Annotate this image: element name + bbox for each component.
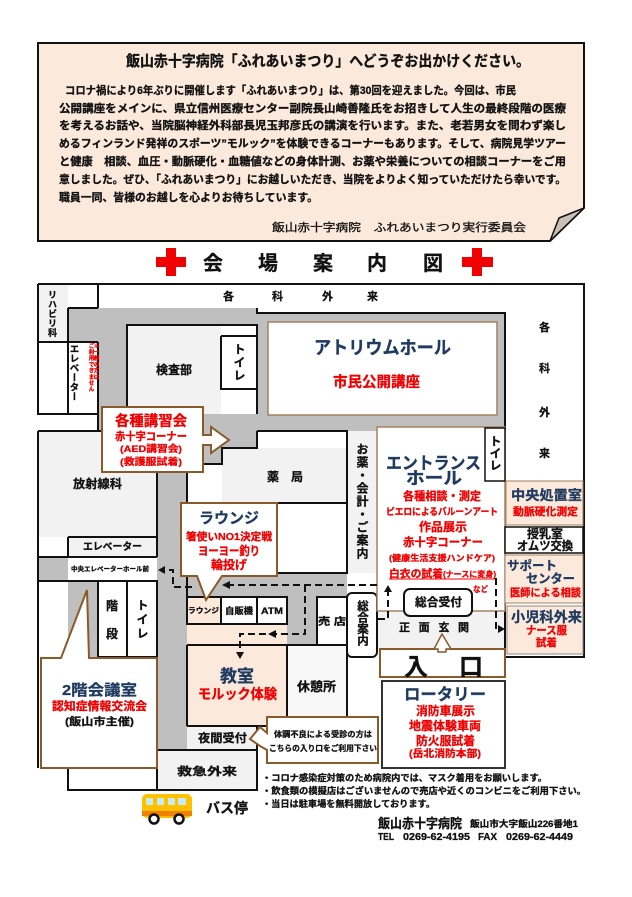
panel: pediatrics: 小児科外来 bbox=[511, 609, 582, 625]
room: elevator: エレベーター bbox=[83, 541, 142, 553]
right label: outpatient clinics: 各 bbox=[539, 320, 550, 334]
footer: hospital contact: FAX bbox=[478, 832, 497, 843]
panel: entrance hall: など bbox=[473, 584, 488, 594]
panel: rotary: 防火服試着 bbox=[416, 733, 475, 748]
room: classroom molkky: モルック体験 bbox=[198, 686, 277, 702]
callout: second-floor meeting room: 2階会議室 bbox=[62, 681, 137, 699]
notes: ・コロナ感染症対策のため病院内では、マスク着用をお願いします。 bbox=[262, 772, 547, 783]
callout: lounge: ラウンジ bbox=[199, 510, 259, 527]
heading: venue guide: 内 bbox=[367, 252, 387, 275]
room: toilet entrance: トイレ bbox=[488, 435, 502, 471]
callout: workshops: 赤十字コーナー bbox=[115, 429, 187, 443]
walls bbox=[38, 284, 584, 790]
callout: lounge bbox=[181, 503, 277, 600]
panel: support center: サポート bbox=[507, 558, 557, 573]
top label: outpatient clinics: 科 bbox=[272, 289, 283, 303]
top label: outpatient clinics: 来 bbox=[367, 289, 378, 303]
room: classroom molkky: 教室 bbox=[220, 667, 254, 686]
panel: central treatment room bbox=[506, 481, 583, 525]
front entrance label: 正面玄関 bbox=[399, 620, 469, 634]
right label: outpatient clinics: 科 bbox=[539, 361, 550, 375]
room: radiology: 放射線科 bbox=[73, 476, 122, 491]
footer: hospital contact: TEL bbox=[378, 832, 394, 843]
elevator notice bbox=[88, 342, 99, 393]
panel: entrance hall bbox=[377, 427, 505, 611]
room: medicine, billing, information: お薬・会計・ご案内 bbox=[355, 443, 369, 560]
room: shop bbox=[317, 597, 347, 645]
main reception: 総合受付 bbox=[415, 595, 463, 609]
heading: venue guide bbox=[156, 248, 493, 276]
arrows: guide route bbox=[158, 566, 505, 659]
notes bbox=[262, 772, 586, 809]
row: lounge, vending, ATM: ATM bbox=[261, 606, 283, 616]
panel: entrance hall: エントランス bbox=[386, 454, 481, 473]
greeting body text: 職員一同、皆様のお越しを心よりお待ちしています。 bbox=[59, 190, 318, 204]
room: classroom molkky bbox=[198, 667, 277, 702]
panel: entrance hall: ピエロによるバルーンアート bbox=[386, 507, 498, 518]
icon: red cross right bbox=[462, 248, 493, 276]
room: general information: 総合案内 bbox=[356, 599, 369, 647]
right label: outpatient clinics bbox=[539, 320, 550, 460]
panel: entrance hall: 作品展示 bbox=[419, 519, 467, 534]
callout: workshops: (救護服試着) bbox=[120, 456, 182, 468]
panel: rotary: 消防車展示 bbox=[416, 703, 475, 718]
notes: ・当日は駐車場を無料開放しております。 bbox=[262, 798, 435, 809]
room: pharmacy: 薬 局 bbox=[267, 469, 303, 484]
room: rest area: 休憩所 bbox=[297, 679, 337, 694]
room: rehabilitation: リハビリ科 bbox=[47, 290, 57, 338]
icon: folded corner bbox=[550, 208, 584, 241]
callout: lounge: 箸使いNO1決定戦 bbox=[186, 530, 273, 543]
panel: entrance hall: 赤十字コーナー bbox=[403, 535, 483, 549]
greeting body text: 公開講座をメインに、県立信州医療センター副院長山崎善隆氏をお招きして人生の最終段階の医療 bbox=[59, 101, 566, 115]
room: toilet west bbox=[127, 581, 157, 657]
entrance sign with arrow: 口 bbox=[459, 654, 483, 681]
panel: support center bbox=[505, 555, 583, 603]
panel: central treatment room: 中央処置室 bbox=[511, 487, 582, 503]
greeting body text bbox=[59, 83, 566, 204]
panel: atrium hall bbox=[268, 322, 497, 415]
icon: red cross left bbox=[156, 248, 186, 276]
callout: workshops: 各種講習会 bbox=[115, 412, 187, 430]
callout: second-floor meeting room: (飯山市主催) bbox=[65, 715, 134, 728]
callout: lounge: ヨーヨー釣り bbox=[198, 543, 260, 558]
panel: support center: センター bbox=[526, 572, 575, 586]
panel: entrance hall: 白衣の試着 bbox=[389, 567, 443, 580]
footer: hospital contact: 飯山市大字飯山226番地1 bbox=[470, 818, 578, 829]
room fills bbox=[38, 284, 505, 790]
callout: workshops bbox=[102, 407, 229, 472]
panel: nursing room bbox=[505, 526, 583, 553]
entrance sign with arrow bbox=[380, 634, 505, 681]
right label: outpatient clinics: 外 bbox=[539, 405, 550, 419]
footer: hospital contact: 0269-62-4195 bbox=[403, 832, 470, 843]
greeting body text: コロナ禍により6年ぶりに開催します「ふれあいまつり」は、第30回を迎えました。今回は、市民 bbox=[65, 83, 516, 97]
row: lounge, vending, ATM bbox=[187, 597, 287, 624]
floor plan bbox=[38, 284, 584, 790]
room: laboratory: 検査部 bbox=[156, 362, 192, 377]
heading: venue guide: 会 bbox=[203, 252, 223, 275]
room: stairs bbox=[98, 581, 127, 657]
footer: hospital contact bbox=[378, 816, 578, 843]
panel: rotary: 地震体験車両 bbox=[409, 718, 481, 733]
panel: rotary: (岳北消防本部) bbox=[409, 747, 481, 760]
panel: entrance hall: (健康生活支援ハンドケア) bbox=[389, 553, 495, 563]
greeting body text: めるフィンランド発祥のスポーツ”モルック”を体験できるコーナーもあります。そして、病院見学ツアー bbox=[59, 136, 566, 150]
footer: hospital contact: 飯山赤十字病院 bbox=[378, 816, 462, 831]
panel: atrium hall: 市民公開講座 bbox=[333, 373, 420, 391]
callout: unwell visitors bbox=[250, 717, 378, 763]
room: shop: 売 店 bbox=[318, 615, 346, 628]
elevator west: エレベーター bbox=[68, 344, 79, 401]
room: toilet entrance bbox=[485, 428, 505, 481]
main reception bbox=[404, 589, 472, 616]
top label: outpatient clinics: 各 bbox=[223, 289, 234, 303]
room: toilet north: トイレ bbox=[232, 343, 246, 382]
room: general information bbox=[347, 593, 377, 657]
label: bus stop: バス停 bbox=[206, 800, 248, 816]
panel: nursing room: 授乳室 bbox=[527, 526, 563, 541]
heading: venue guide: 場 bbox=[258, 252, 278, 275]
elevator notice: ※一般の方は bbox=[92, 343, 99, 381]
heading: venue guide: 案 bbox=[313, 252, 333, 275]
panel: rotary: ロータリー bbox=[404, 685, 486, 704]
room: emergency: 救急外来 bbox=[177, 764, 237, 778]
corridors bbox=[38, 308, 505, 750]
footer: hospital contact: 0269-62-4449 bbox=[506, 832, 573, 843]
panel: central treatment room: 動脈硬化測定 bbox=[513, 505, 579, 518]
callout: second-floor meeting room bbox=[41, 590, 157, 768]
right label: outpatient clinics: 来 bbox=[539, 446, 550, 460]
panel: pediatrics: ナース服 bbox=[526, 624, 567, 637]
panel: atrium hall: アトリウムホール bbox=[314, 338, 451, 358]
room: toilet west: トイレ bbox=[135, 599, 149, 641]
greeting signature: 飯山赤十字病院 ふれあいまつり実行委員会 bbox=[272, 220, 526, 234]
greeting title: 飯山赤十字病院「ふれあいまつり」へどうぞお出かけください。 bbox=[126, 52, 530, 70]
callout: second-floor meeting room: 認知症情報交流会 bbox=[52, 699, 148, 713]
panel: nursing room: オムツ交換 bbox=[517, 538, 573, 553]
panel: pediatrics: 試着 bbox=[536, 636, 557, 649]
entrance sign with arrow: 入 bbox=[404, 654, 428, 681]
row: lounge, vending, ATM: 自販機 bbox=[225, 605, 253, 616]
top label: outpatient clinics bbox=[223, 289, 378, 303]
panel: entrance hall: ホール bbox=[406, 469, 462, 488]
panel: entrance hall: (ナースに変身) bbox=[443, 569, 496, 579]
heading: venue guide: 図 bbox=[423, 253, 443, 275]
callout: lounge: 輪投げ bbox=[211, 557, 247, 572]
panel: entrance hall: 各種相談・測定 bbox=[403, 489, 481, 503]
panel: pediatrics bbox=[507, 606, 583, 654]
icon: bus bbox=[142, 794, 192, 824]
room: night reception: 夜間受付 bbox=[198, 731, 248, 745]
greeting body text: と健康 相談、血圧・動脈硬化・血糖値などの身体計測、お薬や栄養についての相談コーナーをご用 bbox=[59, 154, 566, 168]
panel: support center: 医師による相談 bbox=[510, 586, 581, 599]
top label: outpatient clinics: 外 bbox=[322, 289, 333, 303]
callout: unwell visitors: こちらの入り口をご利用下さい bbox=[269, 743, 377, 753]
callout: workshops: (AED講習会) bbox=[120, 443, 182, 455]
notes: ・飲食類の模擬店はございませんので売店や近くのコンビニをご利用下さい。 bbox=[262, 785, 586, 796]
row: lounge, vending, ATM: ラウンジ bbox=[188, 606, 220, 615]
greeting body text: を考えるお話や、当院脳神経外科部長児玉邦彦氏の講演を行います。また、老若男女を問わず楽し bbox=[59, 118, 566, 132]
floor plan: 階 bbox=[106, 599, 118, 613]
central elevator hall: 中央エレベーターホール前 bbox=[71, 564, 150, 573]
panel: greeting note bbox=[38, 43, 584, 241]
floor plan: 段 bbox=[106, 627, 118, 641]
elevator notice: ご利用できません bbox=[88, 342, 94, 393]
greeting body text: 意しました。ぜひ、「ふれあいまつり」にお越しいただき、当院をよりよく知っていただけたら幸いです。 bbox=[59, 172, 566, 186]
panel: rotary bbox=[382, 681, 505, 768]
callout: unwell visitors: 体調不良による受診の方は bbox=[274, 729, 372, 739]
